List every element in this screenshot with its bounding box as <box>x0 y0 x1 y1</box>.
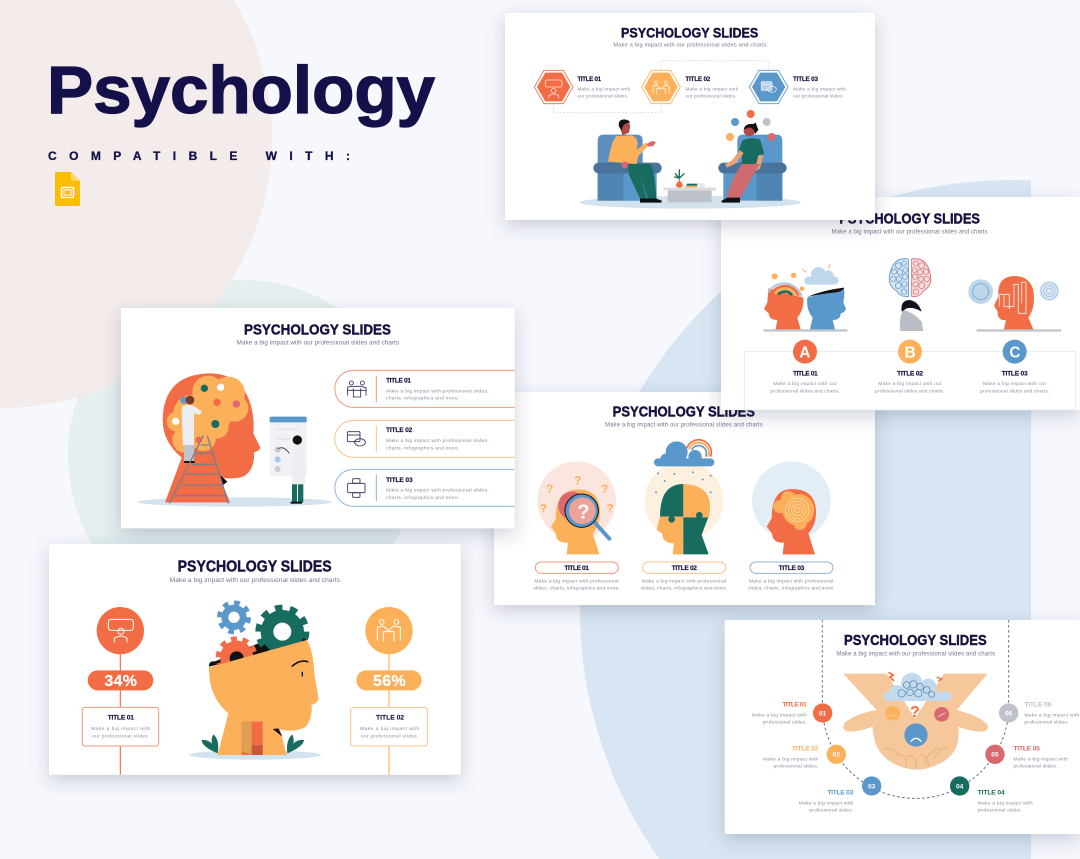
step 02: professional slides. <box>774 764 818 770</box>
column C: C <box>1009 344 1020 361</box>
label pill 02 <box>641 562 727 592</box>
label pill 03: TITLE 03 <box>779 565 805 572</box>
illustration: maze head with speech bubbles <box>968 276 1059 329</box>
illustration: two open heads <box>764 264 846 329</box>
step 04: 04 <box>956 783 964 790</box>
step 01: Make a big impact with <box>752 713 807 719</box>
column C: TITLE 03 <box>1002 371 1028 378</box>
illustration: man talking <box>608 119 662 203</box>
step 03: professional slides. <box>809 808 853 814</box>
step 05 <box>985 745 1068 770</box>
column B: TITLE 02 <box>897 371 923 378</box>
step 06: professional slides. <box>1024 720 1068 726</box>
hexagon item 03 <box>749 70 846 104</box>
label pill 03: slides, charts, infographics and more. <box>748 586 835 592</box>
illustration: ladder and scientist <box>169 396 228 503</box>
card: title 01 <box>335 370 515 407</box>
step 02: Make a big impact with <box>763 756 819 762</box>
illustration: leaves <box>202 734 304 753</box>
illustration: head with magnifier: ? <box>601 482 608 496</box>
label pill 03: Make a big impact with professional <box>749 579 833 585</box>
illustration: chart board and doctor <box>270 417 307 504</box>
column C <box>980 340 1049 394</box>
card: title 02: Make a big impact with professional slides, <box>386 438 489 444</box>
stat column: 34%: TITLE 01 <box>108 715 134 722</box>
icon: google slides file <box>55 172 80 206</box>
illustration: brain lobes and sad person <box>889 259 931 331</box>
hexagon item 03: our professional slides. <box>793 93 844 99</box>
icon: happy emoji <box>885 706 900 721</box>
illustration: head with magnifier: ? <box>574 473 581 487</box>
step 02: TITLE 02 <box>792 746 819 753</box>
stat column: 34%: 34% <box>104 673 137 690</box>
panel: hands and emotions slide <box>725 620 1080 834</box>
hexagon item 02 <box>642 70 739 104</box>
step 01 <box>752 702 832 726</box>
column B: Make a big impact with our <box>878 381 942 387</box>
label pill 01: Make a big impact with professional <box>534 579 619 585</box>
card: title 03: TITLE 03 <box>386 477 413 484</box>
stat column: 34%: Make a big impact with <box>91 726 151 732</box>
hexagon item 01: our professional slides. <box>577 93 628 99</box>
illustration: left armchair <box>593 135 662 201</box>
hexagon item 03: Make a big impact with <box>793 86 846 92</box>
label pill 01: TITLE 01 <box>564 565 589 572</box>
illustration: open hands <box>843 674 988 770</box>
floor shadow <box>138 497 332 507</box>
step 02 <box>763 745 846 770</box>
heading: PSYCHOLOGY SLIDES <box>613 405 755 421</box>
step 04 <box>950 776 1033 814</box>
heading: PSYCHOLOGY SLIDES <box>244 321 391 338</box>
column A: Make a big impact with our <box>773 381 837 387</box>
step 05: 05 <box>991 752 999 759</box>
step 06 <box>999 702 1080 726</box>
stat column: 56%: TITLE 02 <box>376 715 404 722</box>
text box frame <box>744 352 1076 410</box>
illustration: woman patient <box>722 123 764 203</box>
stat column: 56%: Make a big impact with <box>360 726 420 732</box>
panel: brain scientists slide <box>121 308 515 528</box>
compatible with label: COMPATIBLE WITH: <box>48 149 350 163</box>
hexagon item 01 <box>534 70 631 104</box>
step 06: Make a big impact with <box>1024 713 1080 719</box>
heading: PSYCHOLOGY SLIDES <box>839 212 980 228</box>
label pill 03 <box>748 562 835 592</box>
base lines <box>763 329 1061 332</box>
hexagon item 03: TITLE 03 <box>793 76 818 83</box>
step 05: professional slides. <box>1013 764 1057 770</box>
card: title 02 <box>335 420 515 457</box>
label pill 02: TITLE 02 <box>672 565 697 572</box>
step 04: TITLE 04 <box>978 790 1005 797</box>
subheading: Make a big impact with our professional slides and charts <box>605 423 763 429</box>
step 05: TITLE 05 <box>1013 746 1040 753</box>
card: title 01: Make a big impact with professional slides, <box>386 388 489 394</box>
step 03: TITLE 03 <box>827 790 854 797</box>
stat column: 56% <box>351 607 427 775</box>
step 03 <box>799 776 881 814</box>
hexagon item 01: Make a big impact with <box>577 86 631 92</box>
label pill 02: slides, charts, infographics and more. <box>641 586 727 592</box>
heading: PSYCHOLOGY SLIDES <box>178 559 332 576</box>
illustration: open yellow head <box>209 640 319 755</box>
panel: slide with three heads and titles <box>494 392 875 605</box>
panel: therapy session slide <box>505 13 875 220</box>
label pill 02: Make a big impact with professional <box>642 579 726 585</box>
main title: Psychology <box>47 53 435 128</box>
heading: PSYCHOLOGY SLIDES <box>844 633 987 649</box>
column C: professional slides and charts. <box>980 388 1049 394</box>
icon: counselling circle <box>365 607 413 654</box>
hexagon item 02: TITLE 02 <box>685 76 711 83</box>
card: title 02: TITLE 02 <box>386 427 413 434</box>
column A: professional slides and charts. <box>770 388 840 394</box>
step 01: 01 <box>819 710 827 717</box>
step 06: 06 <box>1005 710 1013 717</box>
icon: question mark: ? <box>910 704 920 721</box>
icon: sad emoji <box>904 723 928 747</box>
stat column: 56%: our professional slides. <box>361 734 418 740</box>
step 01: TITLE 01 <box>782 702 807 709</box>
card: title 03: charts, infographics and more. <box>386 495 459 501</box>
card: title 02: charts, infographics and more. <box>386 445 459 451</box>
hexagon item 02: our professional slides. <box>685 93 736 99</box>
column A: TITLE 01 <box>793 371 818 378</box>
stat column: 34%: our professional slides. <box>92 734 149 740</box>
illustration: head with spiral brain <box>752 461 831 554</box>
illustration: thought cloud <box>883 672 952 701</box>
column A: A <box>799 344 810 361</box>
card: title 03 <box>335 469 515 506</box>
stat column: 34% <box>82 607 159 775</box>
illustration: green and orange gears in open head <box>209 608 308 676</box>
subheading: Make a big impact with our professional slides and charts <box>237 339 399 346</box>
column B: professional slides and charts. <box>875 388 944 394</box>
illustration: right armchair <box>718 135 787 201</box>
column A <box>770 340 840 394</box>
dotted connectors <box>554 61 768 113</box>
dashed arc connector <box>822 620 1009 798</box>
floating emotion bubbles <box>726 110 776 141</box>
illustration: head with magnifier: ? <box>606 502 614 516</box>
illustration: coffee table with plant and books <box>663 169 716 202</box>
stat column: 56%: 56% <box>373 673 406 690</box>
illustration: head with magnifier: ? <box>546 482 553 496</box>
illustration: head with magnifier: ? <box>540 502 547 516</box>
illustration: head with magnifier: ? <box>577 501 590 523</box>
icon: therapist circle <box>97 607 144 654</box>
step 03: Make a big impact with <box>799 800 854 806</box>
card: title 03: Make a big impact with professional slides, <box>386 488 489 494</box>
label pill 01 <box>533 562 620 592</box>
column C: Make a big impact with our <box>983 381 1047 387</box>
step 02: 02 <box>833 752 840 759</box>
illustration: puzzle head under cloud <box>645 440 723 554</box>
floor shadow <box>579 196 801 209</box>
label pill 01: slides, charts, infographics and more. <box>533 586 620 592</box>
heading: PSYCHOLOGY SLIDES <box>621 24 758 40</box>
card: title 01: charts, infographics and more. <box>386 396 459 402</box>
hexagon item 02: Make a big impact with <box>685 86 739 92</box>
step 05: Make a big impact with <box>1013 756 1068 762</box>
step 03: 03 <box>868 783 876 790</box>
subheading: Make a big impact with our professional slides and charts <box>170 577 341 584</box>
subheading: Make a big impact with our professional slides and charts <box>836 651 995 657</box>
illustration: big head with brain <box>163 373 260 502</box>
icon: angry emoji <box>934 707 949 722</box>
card: title 01: TITLE 01 <box>386 378 411 385</box>
floor shadow <box>189 750 321 760</box>
step 04: professional slides. <box>978 808 1022 814</box>
panel: A B C heads slide <box>721 197 1080 410</box>
illustration: head with magnifier <box>537 461 616 554</box>
column B <box>875 340 944 394</box>
column B: B <box>905 344 916 361</box>
step 04: Make a big impact with <box>978 800 1033 806</box>
step 06: TITLE 06 <box>1024 702 1052 709</box>
icon: blue gear <box>219 603 249 632</box>
hexagon item 01: TITLE 01 <box>577 76 601 83</box>
panel: gears head percentages slide <box>49 544 461 775</box>
subheading: Make a big impact with our professional slides and charts <box>613 43 767 49</box>
subheading: Make a big impact with our professional slides and charts <box>832 229 988 235</box>
step 01: professional slides. <box>763 720 807 726</box>
